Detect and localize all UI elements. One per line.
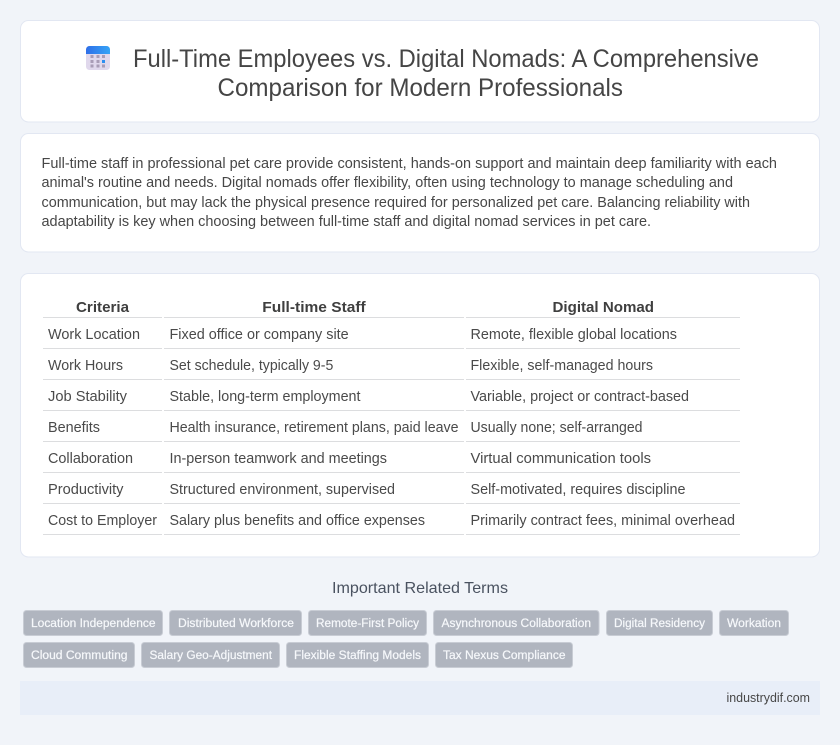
tag: location independence [24,610,162,636]
tag: remote-first policy [308,610,426,636]
table row: benefits: Health insurance, retirement plans, paid leave [170,420,458,436]
table row: work location: Work Location [48,327,140,343]
tag: flexible staffing models: Flexible Staffing Models [294,648,421,662]
table row: work hours: Work Hours [48,358,123,374]
tag: digital residency [606,610,712,636]
heading: related terms: Important Related Terms [332,580,508,597]
icon: calendar [86,46,110,70]
panel: introduction [20,134,820,252]
table header row: Criteria [76,300,130,316]
tag: tax nexus compliance [436,642,572,668]
tag: distributed workforce [170,610,302,636]
text block: introduction paragraph: adaptability is key when choosing between full-time staff and digital nomad services in pet care. [42,214,651,230]
table header row: Digital Nomad [552,300,654,316]
table row: work location: Fixed office or company site [170,327,349,343]
table row: collaboration: Virtual communication tools [470,451,651,467]
text block: introduction paragraph: Full-time staff in professional pet care provide consistent, hands-on support and maintain deep familiarity with each [42,156,777,172]
table row: job stability: Stable, long-term employment [170,389,360,405]
table row: work hours: Flexible, self-managed hours [470,358,653,374]
table header row [43,300,740,318]
footer: industrydif.com [726,690,810,705]
table row: job stability [43,389,740,410]
table row: productivity: Productivity [48,482,124,498]
table row: cost to employer: Cost to Employer [48,513,157,529]
tag: salary geo-adjustment [142,642,280,668]
table row: collaboration: In-person teamwork and meetings [170,451,387,467]
table row: productivity: Self-motivated, requires discipline [470,482,686,498]
text block: introduction paragraph: communication, but may lack the physical presence required for personalized pet care. Balancing reliability with [42,195,750,211]
panel: header [20,20,820,122]
table row: cost to employer [43,513,740,534]
text block: introduction paragraph: animal's routine and needs. Digital nomads offer flexibility, often using technology to manage scheduling and [42,175,733,191]
tag: cloud commuting: Cloud Commuting [31,648,128,662]
tag: asynchronous collaboration: Asynchronous Collaboration [442,616,591,630]
tag: salary geo-adjustment: Salary Geo-Adjustment [150,648,273,662]
table row: productivity [43,482,740,504]
table row: benefits: Benefits [48,420,100,436]
table row: benefits [43,420,740,442]
table row: job stability: Variable, project or contract-based [470,389,689,405]
footer [20,681,820,715]
tag: remote-first policy: Remote-First Policy [316,616,420,630]
table row: work location: Remote, flexible global locations [470,327,677,343]
tag: digital residency: Digital Residency [614,616,706,630]
tag: workation [720,610,788,636]
title: Full-Time Employees vs. Digital Nomads: A Comprehensive [133,45,759,73]
tag: cloud commuting [24,642,134,668]
tag: distributed workforce: Distributed Workforce [178,616,294,630]
table row: collaboration [43,451,740,472]
table row: cost to employer: Salary plus benefits and office expenses [170,513,425,529]
tag: asynchronous collaboration [434,610,599,636]
tag: tax nexus compliance: Tax Nexus Compliance [443,648,566,662]
table row: productivity: Structured environment, supervised [170,482,395,498]
table row: work hours [43,358,740,380]
related term tags [24,610,788,668]
table row: work location [43,327,740,348]
table row: cost to employer: Primarily contract fees, minimal overhead [470,513,735,529]
title [133,45,759,102]
table row: job stability: Job Stability [48,389,128,405]
table row: benefits: Usually none; self-arranged [470,420,642,436]
tag: flexible staffing models [286,642,428,668]
tag: workation: Workation [727,616,781,630]
table row: work hours: Set schedule, typically 9-5 [170,358,333,374]
text block: introduction paragraph [42,156,777,230]
table header row: Full-time Staff [262,300,366,316]
tag: location independence: Location Independence [31,616,156,630]
panel: comparison table [20,274,820,557]
table row: collaboration: Collaboration [48,451,133,467]
title: Comparison for Modern Professionals [218,74,623,102]
